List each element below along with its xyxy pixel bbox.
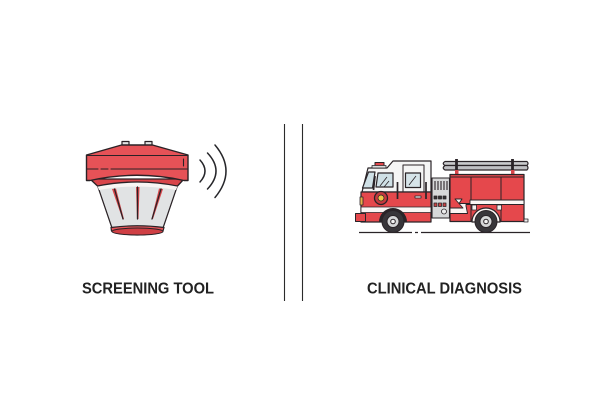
headlight (360, 197, 363, 205)
label: clinical diagnosis: CLINICAL DIAGNOSIS (367, 280, 522, 298)
detector lower collar (90, 179, 184, 186)
ground line (359, 232, 530, 234)
rear body (450, 174, 524, 222)
door outline (403, 165, 424, 192)
base ring ellipse (112, 228, 163, 235)
cab upper (362, 161, 431, 192)
pump panel (432, 178, 450, 218)
detector base ring (111, 226, 164, 235)
front wheel (382, 210, 404, 232)
pump vents (435, 181, 447, 190)
rear wheel (475, 210, 497, 232)
rear step (524, 219, 528, 222)
detector body lines (86, 156, 188, 169)
detector white band (97, 181, 178, 190)
front bumper (356, 214, 366, 222)
icon: sound waves (200, 145, 226, 198)
glass glints (380, 176, 416, 187)
rear wheel arch (472, 208, 500, 222)
cab white stripe (361, 207, 431, 212)
divider lines (284, 124, 302, 301)
ladder mounts (455, 170, 514, 174)
upper body stripe (470, 200, 524, 204)
detector grey skirt (98, 184, 177, 228)
front wheel arch (379, 208, 407, 222)
beacon base (372, 166, 386, 168)
grab rails (374, 176, 426, 199)
pump gauges (434, 196, 446, 214)
door window (406, 173, 420, 188)
icon: fire truck (356, 159, 530, 232)
detector slot shadows (114, 187, 161, 219)
icon: smoke detector (86, 142, 188, 235)
ladder (443, 159, 528, 174)
arch brackets (472, 205, 502, 210)
cab badge (374, 192, 388, 204)
door handle (415, 196, 421, 198)
detector pegs (122, 142, 152, 146)
cab lower red (361, 192, 431, 222)
rear stripe and bolt (450, 199, 524, 214)
beacon (375, 162, 384, 166)
cab front window (376, 173, 393, 187)
body panel lines (450, 177, 524, 222)
windshield (362, 172, 375, 188)
detector body (86, 145, 188, 180)
detector slots (112, 187, 163, 219)
label: screening tool: SCREENING TOOL (82, 280, 214, 298)
